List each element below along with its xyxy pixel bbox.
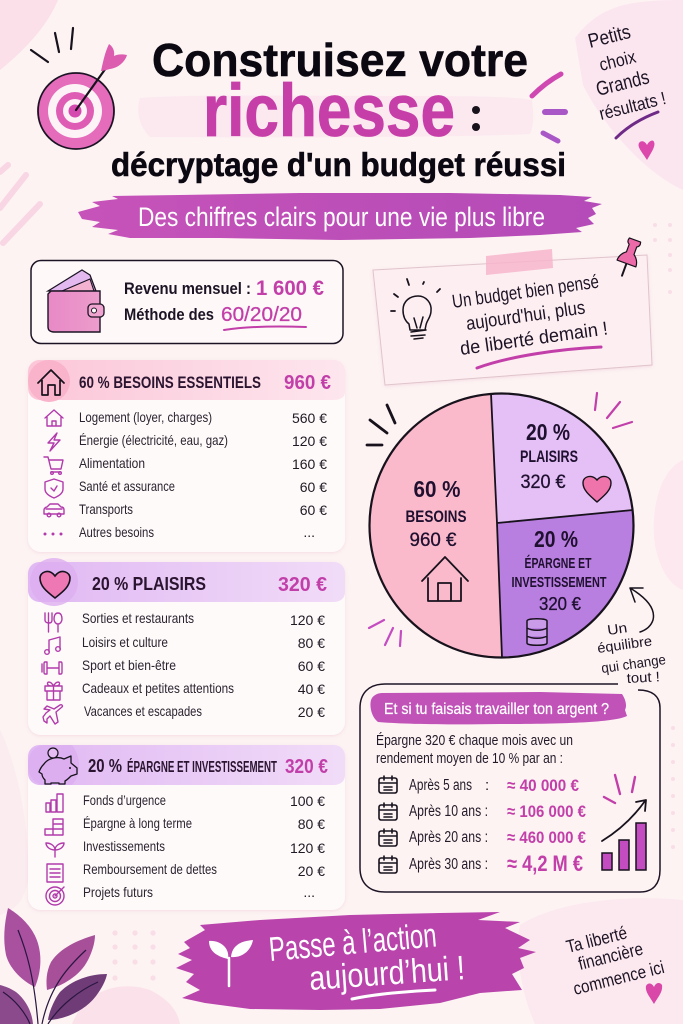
header: needs: [28, 360, 345, 402]
slice: epargne: 320 €: [539, 594, 581, 614]
slice: plaisirs: PLAISIRS: [520, 447, 578, 466]
row: sante: Santé et assurance: [79, 478, 175, 494]
arrow and note: equilibre: équilibre: [596, 632, 653, 656]
row: 5 years: Après 5 ans: [409, 777, 472, 794]
panel: income box: 60/20/20: [221, 304, 302, 326]
row: logement: Logement (loyer, charges): [79, 409, 212, 425]
side note: petits choix: Petits: [586, 21, 633, 53]
title: richesse: [203, 69, 455, 152]
row: vacances: Vacances et escapades: [84, 703, 202, 719]
row: alimentation: [44, 455, 327, 474]
row: alimentation: Alimentation: [79, 455, 145, 471]
arrow and note: equilibre: qui change: [600, 651, 667, 676]
row: sorties: Sorties et restaurants: [82, 610, 194, 626]
row: sorties: [45, 610, 325, 632]
side note: liberte financiere: commence ici: [571, 957, 666, 999]
call to action banner: Passe à l’action: [267, 916, 438, 969]
row: autres: Autres besoins: [79, 524, 154, 540]
side note: liberte financiere: [564, 922, 666, 1004]
pie chart: [370, 393, 634, 658]
panel: income box: Revenu mensuel :: [124, 279, 251, 298]
row: loisirs: [45, 634, 325, 654]
panel: compound growth: [360, 684, 660, 892]
tape: [486, 249, 553, 275]
panel: needs 60%: [28, 360, 345, 552]
row: investissements: Investissements: [83, 838, 165, 854]
row: energie: Énergie (électricité, eau, gaz): [79, 432, 228, 448]
row: cadeaux: Cadeaux et petites attentions: [82, 680, 234, 696]
row: sport: [42, 657, 325, 674]
icon: piggy bank: [39, 748, 77, 784]
call to action banner: aujourd’hui !: [308, 949, 466, 998]
subtitle banner: [78, 193, 602, 240]
subtitle banner: Des chiffres clairs pour une vie plus libre: [138, 202, 545, 232]
row: autres: [44, 524, 315, 540]
panel: income box: [31, 260, 343, 344]
row: 20 years: ≈ 460 000 €: [507, 828, 586, 847]
row: transports: Transports: [79, 501, 133, 517]
row: 10 years: [379, 802, 586, 821]
intro text: [376, 732, 573, 767]
quote text: Un budget bien pensé: [451, 272, 600, 313]
row: autres: ...: [303, 524, 315, 540]
row: fonds: 100 €: [290, 793, 325, 809]
intro text: rendement moyen de 10 % par an :: [376, 750, 563, 767]
row: 5 years: [379, 776, 579, 795]
row: sport: Sport et bien-être: [82, 657, 176, 673]
icon: pushpin: [613, 237, 644, 279]
row: energie: [48, 432, 327, 451]
header: needs: 960 €: [284, 372, 331, 394]
row: dettes: Remboursement de dettes: [83, 861, 217, 877]
note: budget quote: [373, 237, 652, 385]
row: energie: 120 €: [292, 433, 327, 449]
row: logement: [45, 409, 327, 426]
icon: white sprout: [209, 940, 253, 986]
row: transports: [44, 501, 327, 518]
call to action banner: [176, 912, 536, 1010]
row: fonds: [46, 792, 325, 812]
slice: besoins: [406, 476, 468, 601]
panel: income box: 1 600 €: [256, 277, 324, 300]
row: projets: [46, 884, 315, 905]
header: pleasures: [28, 558, 345, 606]
slice: besoins: BESOINS: [406, 507, 466, 526]
row: investissements: [46, 838, 325, 857]
slice: plaisirs: 20 %: [526, 419, 570, 445]
row: projets: Projets futurs: [83, 884, 153, 900]
row: dettes: [47, 861, 325, 882]
row: epargne: [45, 815, 325, 835]
header: pleasures: 20 % PLAISIRS: [92, 574, 206, 594]
illustration: leaves: [0, 908, 107, 1024]
row: loisirs: Loisirs et culture: [82, 634, 168, 650]
row: 30 years: ≈ 4,2 M €: [507, 851, 583, 876]
side note: petits choix: [586, 21, 668, 160]
pill heading: [370, 692, 627, 724]
row: cadeaux: 40 €: [298, 681, 325, 697]
side note: liberte financiere: financière: [576, 939, 645, 974]
row: dettes: 20 €: [298, 863, 325, 879]
header: savings: ÉPARGNE ET INVESTISSEMENT: [127, 757, 277, 776]
row: investissements: 120 €: [290, 840, 325, 856]
icon: growth chart: [602, 775, 646, 870]
header: pleasures: 320 €: [278, 574, 327, 596]
icon: light bulb: [391, 279, 440, 339]
row: epargne: Épargne à long terme: [83, 815, 192, 831]
row: 30 years: Après 30 ans :: [409, 856, 488, 873]
panel: income box: Méthode des: [124, 305, 214, 324]
row: logement: 560 €: [292, 410, 327, 426]
slice: epargne: 20 %: [534, 526, 578, 552]
row: 20 years: Après 20 ans :: [409, 829, 488, 846]
row: vacances: 20 €: [298, 704, 325, 720]
side note: petits choix: résultats !: [597, 88, 668, 124]
panel: pleasures 20%: [28, 558, 345, 735]
header: needs: 60 % BESOINS ESSENTIELS: [79, 373, 261, 392]
header: savings: 20 %: [88, 756, 122, 776]
row: cadeaux: [45, 680, 325, 700]
row: fonds: Fonds d’urgence: [83, 792, 166, 808]
slice: epargne: ÉPARGNE ET: [524, 555, 592, 572]
side note: petits choix: Grands: [594, 66, 652, 101]
slice: plaisirs: 320 €: [520, 472, 566, 493]
intro text: Épargne 320 € chaque mois avec un: [376, 732, 573, 749]
title: décryptage d'un budget réussi: [111, 146, 566, 183]
decorative rays near title: [532, 74, 565, 141]
row: projets: ...: [303, 884, 315, 900]
side note: liberte financiere: Ta liberté: [564, 922, 629, 957]
title: [111, 34, 566, 183]
row: sport: 60 €: [298, 658, 325, 674]
side note: petits choix: choix: [597, 47, 638, 75]
row: sorties: 120 €: [290, 612, 325, 628]
row: epargne: 80 €: [298, 816, 325, 832]
slice: besoins: 960 €: [410, 530, 457, 551]
quote text: [451, 272, 609, 368]
row: vacances: [43, 703, 325, 724]
icon: wallet: [48, 270, 104, 332]
slice: epargne: [512, 526, 606, 645]
pill heading: Et si tu faisais travailler ton argent ?: [384, 701, 609, 718]
row: 20 years: [379, 828, 586, 847]
arrow and note: equilibre: Un: [606, 619, 628, 638]
row: 30 years: [379, 851, 583, 876]
row: loisirs: 80 €: [298, 635, 325, 651]
title: Construisez votre: [152, 34, 528, 86]
row: 5 years: ≈ 40 000 €: [507, 776, 579, 795]
row: transports: 60 €: [300, 502, 327, 518]
icon: target with arrow: [31, 28, 127, 149]
arrow and note: equilibre: [596, 588, 667, 686]
slice: epargne: INVESTISSEMENT: [512, 574, 606, 591]
header: savings: [28, 745, 345, 785]
quote text: de liberté demain !: [459, 318, 609, 360]
row: 10 years: Après 10 ans :: [409, 803, 488, 820]
row: sante: 60 €: [300, 479, 327, 495]
row: sante: [45, 478, 327, 498]
header: savings: 320 €: [285, 756, 328, 778]
pie burst marks: [367, 393, 632, 646]
arrow and note: equilibre: tout !: [626, 668, 660, 686]
row: 10 years: ≈ 106 000 €: [507, 802, 586, 821]
slice: plaisirs: [520, 419, 611, 502]
row: 5 years: :: [485, 777, 489, 794]
row: alimentation: 160 €: [292, 456, 327, 472]
quote text: aujourd'hui, plus: [465, 297, 587, 335]
panel: savings 20%: [28, 745, 345, 910]
slice: besoins: 60 %: [414, 476, 460, 502]
